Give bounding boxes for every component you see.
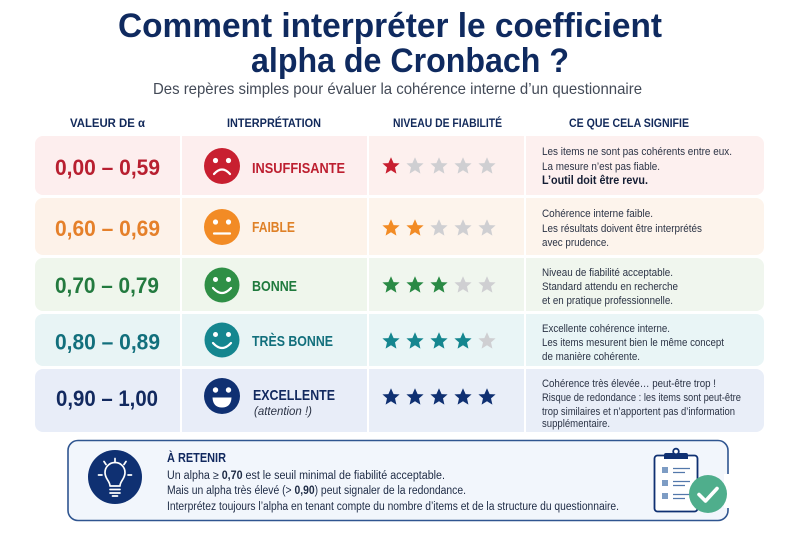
value range: 0,80 – 0,89 — [55, 330, 160, 354]
meaning: Les items ne sont pas cohérents entre eux. — [542, 146, 732, 158]
stars: 3 of 5 — [382, 276, 496, 293]
row: excellente — [35, 369, 764, 432]
icon: smiling face — [204, 322, 240, 358]
meaning: Les items mesurent bien le même concept — [542, 337, 724, 349]
icon: lightbulb — [88, 450, 142, 504]
text — [167, 470, 619, 513]
stars: 4 of 5 — [382, 332, 496, 349]
label: INSUFFISANTE — [252, 160, 345, 177]
meaning: Niveau de fiabilité acceptable. — [542, 267, 673, 279]
label note: (attention !) — [254, 406, 312, 418]
stars: 1 of 5 — [382, 157, 496, 174]
icon: neutral face — [204, 209, 240, 245]
value range: 0,70 – 0,79 — [55, 273, 159, 298]
meaning — [542, 146, 732, 187]
meaning: de manière cohérente. — [542, 351, 640, 363]
meaning: Cohérence très élevée… peut-être trop ! — [542, 378, 716, 390]
label: EXCELLENTE — [253, 387, 335, 404]
row: faible — [35, 198, 764, 255]
text: Interprétez toujours l’alpha en tenant compte du nombre d’items et de la structure du questionnaire. — [167, 501, 619, 513]
column headers: VALEUR DE α — [70, 116, 146, 130]
stars: 5 of 5 — [382, 388, 496, 405]
meaning: supplémentaire. — [542, 418, 610, 430]
meaning — [542, 323, 724, 363]
row: bonne — [35, 258, 764, 311]
meaning: L’outil doit être revu. — [542, 175, 648, 187]
meaning: La mesure n’est pas fiable. — [542, 161, 660, 173]
subtitle: Des repères simples pour évaluer la cohérence interne d’un questionnaire — [153, 81, 642, 98]
value range: 0,00 – 0,59 — [55, 155, 160, 180]
title: Comment interpréter le coefficient — [118, 7, 662, 45]
column headers: NIVEAU DE FIABILITÉ — [393, 115, 502, 130]
icon: clipboard checklist — [654, 449, 727, 513]
column headers — [70, 115, 689, 130]
icon: check badge — [689, 475, 727, 513]
meaning: Cohérence interne faible. — [542, 208, 653, 220]
meaning: et en pratique professionnelle. — [542, 295, 673, 307]
column headers: CE QUE CELA SIGNIFIE — [569, 116, 689, 130]
row: très bonne — [35, 314, 764, 366]
meaning: Risque de redondance : les items sont peut-être — [542, 392, 741, 404]
stars: 2 of 5 — [382, 219, 496, 236]
meaning: trop similaires et n’apportent pas d’information — [542, 406, 735, 418]
meaning — [542, 208, 702, 249]
meaning: avec prudence. — [542, 237, 609, 249]
title: alpha de Cronbach ? — [251, 42, 569, 80]
heading: À RETENIR — [167, 450, 227, 465]
meaning: Excellente cohérence interne. — [542, 323, 670, 335]
title — [118, 7, 662, 80]
icon: smiling face — [204, 268, 240, 302]
label: BONNE — [252, 278, 297, 295]
meaning: Standard attendu en recherche — [542, 281, 678, 293]
icon: sad face — [204, 148, 240, 184]
column headers: INTERPRÉTATION — [227, 115, 321, 130]
meaning — [542, 378, 741, 430]
value range: 0,60 – 0,69 — [55, 216, 160, 241]
meaning: Les résultats doivent être interprétés — [542, 223, 702, 235]
text: Mais un alpha très élevé (> 0,90) peut signaler de la redondance. — [167, 485, 466, 497]
meaning — [542, 267, 678, 307]
label: FAIBLE — [252, 219, 295, 236]
icon: laughing face — [204, 378, 240, 414]
value range: 0,90 – 1,00 — [56, 386, 158, 411]
callout: à retenir — [68, 440, 732, 520]
label: TRÈS BONNE — [252, 333, 333, 350]
row: insuffisante — [35, 136, 764, 195]
text: Un alpha ≥ 0,70 est le seuil minimal de fiabilité acceptable. — [167, 470, 445, 482]
